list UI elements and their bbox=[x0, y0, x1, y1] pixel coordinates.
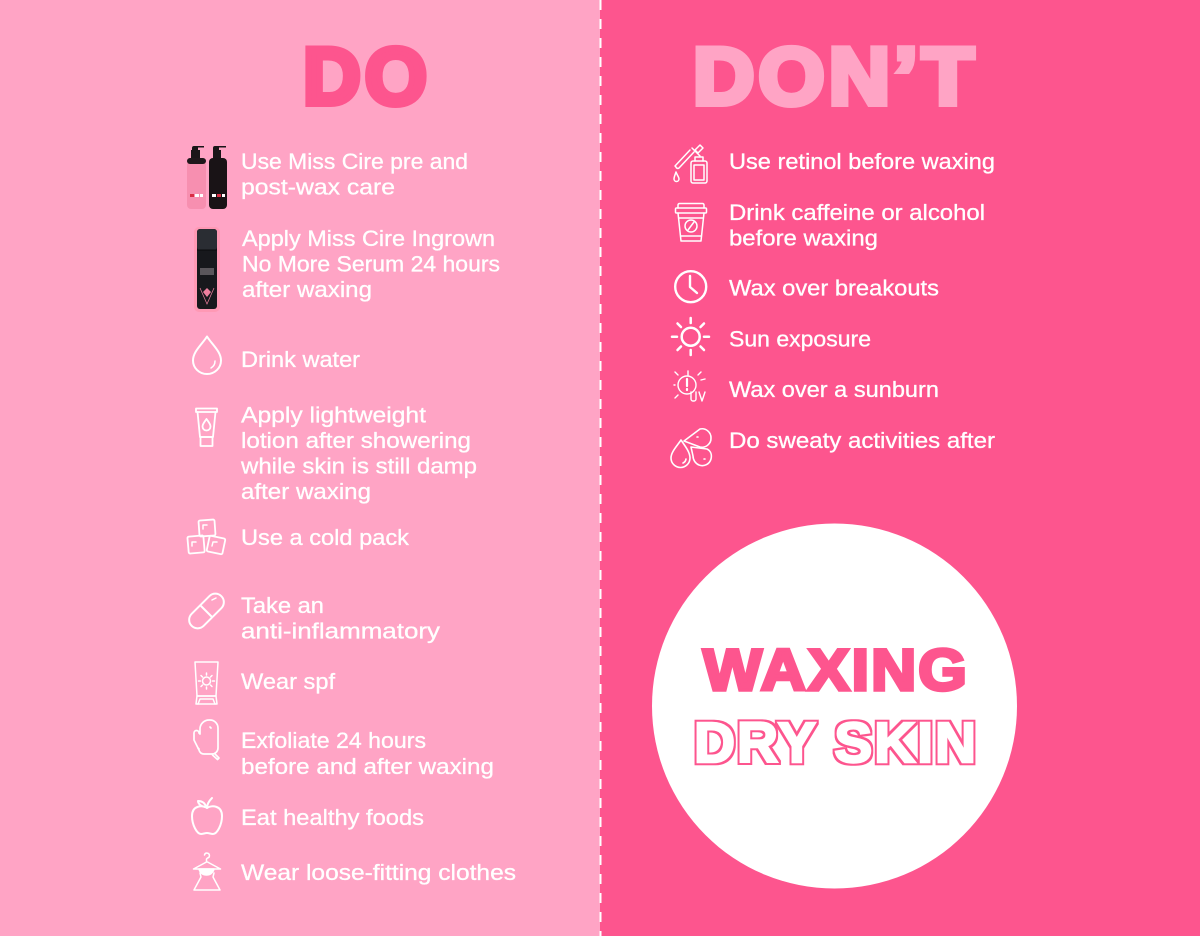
text: wear spf: Wear spf bbox=[241, 669, 336, 694]
icon: ice cubes bbox=[187, 519, 225, 554]
text: ingrown serum: after waxing bbox=[242, 277, 372, 302]
text: use miss cire care: Use Miss Cire pre and bbox=[241, 149, 468, 174]
icon: sun bbox=[672, 318, 709, 355]
text: anti-inflammatory bbox=[241, 593, 440, 644]
text: apply lotion: after waxing bbox=[241, 479, 371, 504]
icon: coffee cup bbox=[676, 204, 706, 241]
text: exfoliate: Exfoliate 24 hours bbox=[241, 728, 426, 753]
text: caffeine or alcohol bbox=[729, 200, 985, 250]
text: ingrown serum: Apply Miss Cire Ingrown bbox=[242, 226, 495, 251]
text: apply lotion: while skin is still damp bbox=[240, 454, 477, 478]
icon: lotion tube bbox=[196, 408, 217, 446]
text: caffeine or alcohol: before waxing bbox=[729, 226, 878, 250]
icon: water drop bbox=[193, 336, 221, 374]
text: ingrown serum bbox=[242, 226, 500, 302]
text: retinol: Use retinol before waxing bbox=[729, 149, 995, 174]
icon: pill capsule bbox=[186, 590, 227, 632]
text: cold pack: Use a cold pack bbox=[241, 525, 410, 550]
text: exfoliate bbox=[241, 728, 494, 779]
text: anti-inflammatory: Take an bbox=[241, 593, 324, 618]
icon: spf tube bbox=[195, 662, 218, 704]
badge title: dry skin: DRY SKIN bbox=[694, 711, 978, 775]
text: apply lotion: Apply lightweight bbox=[241, 402, 426, 428]
icon: apple bbox=[192, 798, 222, 834]
icon: dress on hanger bbox=[194, 853, 220, 890]
heading: don't: DON’T bbox=[693, 32, 978, 122]
icon: sweat drops bbox=[671, 429, 711, 468]
text: apply lotion: lotion after showering bbox=[241, 428, 471, 453]
text: exfoliate: before and after waxing bbox=[241, 754, 494, 779]
panel: don't background bbox=[600, 0, 1200, 936]
badge title: waxing: WAXING bbox=[703, 638, 969, 703]
text: sunburn: Wax over a sunburn bbox=[729, 377, 939, 402]
text: anti-inflammatory: anti-inflammatory bbox=[241, 618, 440, 644]
heading: do: DO bbox=[303, 32, 431, 122]
text: use miss cire care: post-wax care bbox=[241, 174, 395, 200]
text: loose clothes: Wear loose-fitting clothes bbox=[241, 860, 516, 885]
icon: ingrown serum bottle bbox=[194, 227, 220, 312]
icon: retinol dropper bbox=[674, 145, 707, 183]
text: drink water: Drink water bbox=[241, 347, 360, 372]
text: sun exposure: Sun exposure bbox=[729, 326, 871, 352]
badge: waxing dry skin bbox=[652, 524, 1017, 888]
panel: do background bbox=[0, 0, 600, 936]
text: use miss cire care bbox=[241, 149, 468, 200]
text: caffeine or alcohol: Drink caffeine or alcohol bbox=[729, 200, 985, 225]
text: ingrown serum: No More Serum 24 hours bbox=[242, 252, 500, 276]
text: healthy foods: Eat healthy foods bbox=[241, 805, 424, 830]
text: breakouts: Wax over breakouts bbox=[729, 276, 939, 300]
icon: pre and post-wax care bottles bbox=[187, 146, 227, 209]
icon: uv sunburn bbox=[674, 371, 705, 401]
text: sweaty activities: Do sweaty activities after bbox=[729, 428, 995, 453]
icon: clock bbox=[675, 271, 706, 302]
text: apply lotion bbox=[240, 402, 477, 504]
icon: exfoliating mitt bbox=[194, 720, 219, 760]
